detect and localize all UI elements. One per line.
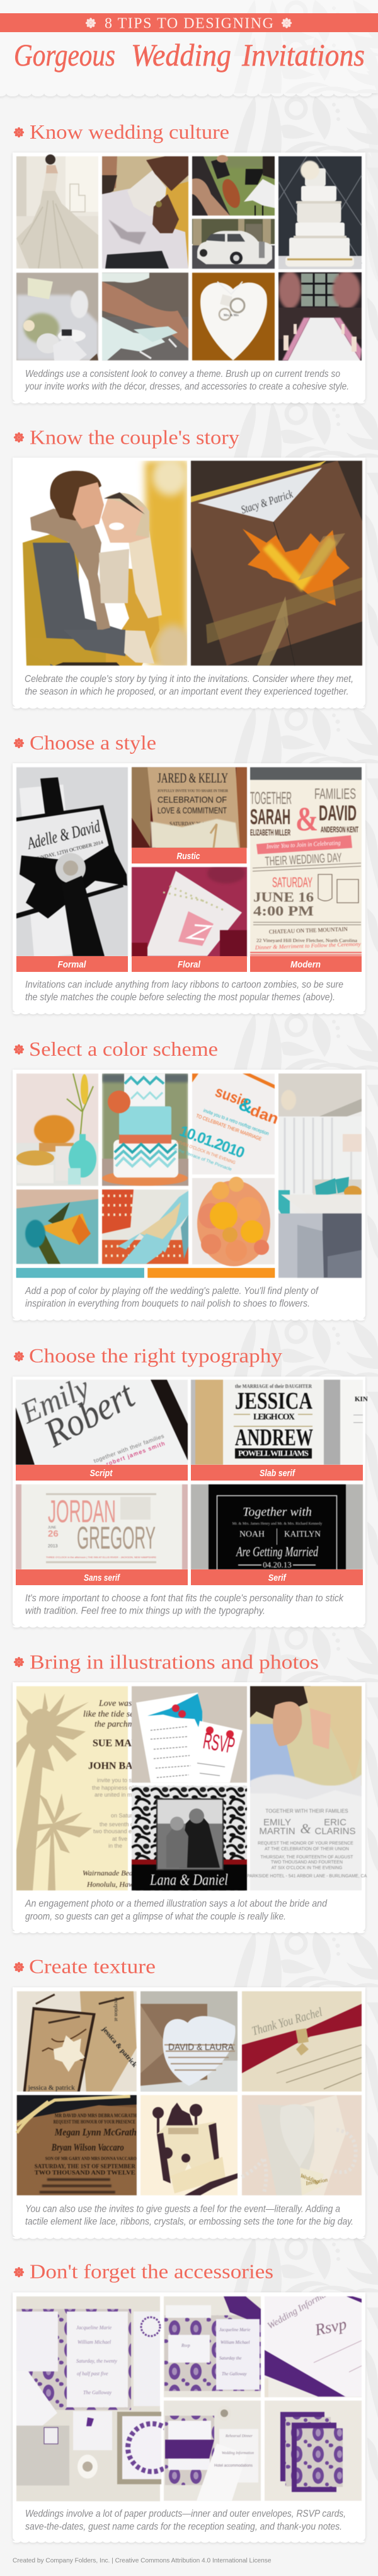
photo: purple stationery suite: Saturday, the twenty [76, 2358, 117, 2364]
panel: Choose a style [13, 763, 365, 1014]
photo: rustic invitation: SATURDAY 26 APRIL 2014 [169, 821, 226, 826]
label: Modern [250, 956, 362, 972]
photo: purple stationery suite: The Galloway [83, 2389, 112, 2395]
icon: flower [14, 2267, 24, 2277]
photo: lace couple invitation: & [300, 1820, 311, 1836]
photo: sans serif invitation: 26 [48, 1528, 59, 1539]
photo: sans serif invitation [15, 1484, 188, 1569]
photo: calla boutonniere [16, 1189, 99, 1264]
caption: the style matches the couple before selecting the most popular themes (above). [25, 992, 335, 1003]
photo: palm tree invitation: Love was [98, 1699, 132, 1708]
photo: serif invitation: NOAH [239, 1530, 265, 1539]
photo: lace couple invitation: CLARINS [314, 1826, 356, 1837]
photo: palm tree invitation: SUE MARIE [93, 1738, 149, 1748]
title: Wedding [131, 37, 231, 72]
header ornament [234, 0, 378, 282]
photo: susie and dan invitation: dan [248, 1102, 281, 1128]
photo: susie and dan invitation: & [236, 1094, 256, 1118]
panel card [13, 1987, 365, 2239]
photo: palm tree invitation: the seventh of [100, 1821, 135, 1827]
photo: kraft invitation with flower [16, 1990, 139, 2093]
photo: ceremony aisle [278, 272, 362, 361]
photo: orange bouquet [192, 1176, 275, 1267]
caption [25, 1286, 319, 1309]
photo: red ribbon invitation: Thank You Rachel [250, 2005, 324, 2038]
photo: sans serif invitation: JORDAN [48, 1494, 116, 1529]
photo: serif invitation: KAITLYN [284, 1530, 321, 1539]
caption [25, 2509, 346, 2533]
photo: embossed heart with pearls: Invitation [305, 2176, 328, 2186]
photo: purple envelopes [265, 2401, 362, 2501]
photo: modern invitation: TOGETHER [250, 788, 292, 807]
label: Serif: Serif [268, 1573, 287, 1583]
caption [25, 674, 353, 697]
photo: lace couple invitation: ERIC [324, 1817, 346, 1828]
photo: palm tree invitation: are united in marriage [94, 1791, 150, 1798]
icon: flower [14, 127, 24, 137]
panel card [13, 763, 365, 1014]
panel: Bring in illustrations and photos [13, 1682, 367, 1933]
photo: owl invitation [131, 1685, 247, 1783]
photo: lace couple invitation: EMILY [263, 1817, 291, 1828]
photo: slab serif invitation [190, 1379, 368, 1465]
photo: folder and ring bowl [163, 2400, 261, 2501]
photo: wood invitation: SATURDAY, THE 1ST OF SEPTEMBER [35, 2163, 135, 2169]
panel card [13, 1682, 365, 1933]
label: Sans serif [16, 1569, 188, 1585]
photo: wedding cake [278, 156, 362, 270]
label: Modern: Modern [290, 959, 321, 970]
label: Script [16, 1465, 188, 1481]
caption [25, 979, 343, 1003]
panel card [13, 2292, 365, 2543]
photo: lace couple invitation: AT THE CELEBRATION OF THEIR UNION [265, 1847, 349, 1851]
caption: groom, so guests can get a glimpse of what the couple is really like. [25, 1911, 286, 1922]
icon: flower [14, 1962, 24, 1972]
icon: banner flower left [86, 18, 96, 28]
photo: wood invitation: TWO THOUSAND AND TWELVE [35, 2169, 135, 2176]
photo: sans serif invitation: 2013 [48, 1544, 58, 1549]
caption: An engagement photo or a themed illustration says a lot about the bride and [25, 1898, 328, 1909]
photo: heart ring dish [192, 272, 275, 361]
label: Slab serif [191, 1465, 363, 1481]
heading: Don't forget the accessories: Don't forget the accessories [30, 2260, 273, 2283]
photo: palm tree invitation: Wairnanade Beach [83, 1868, 140, 1877]
photo: susie and dan invitation: SEVEN O'CLOCK IN THE EVENING [175, 1140, 236, 1165]
photo: lace couple invitation: MARTIN [259, 1826, 295, 1837]
photo: purple stationery suite [16, 2296, 164, 2502]
photo: RSVP close-up: Wedding Information [266, 2282, 340, 2331]
label: Formal [16, 956, 128, 972]
photo: bride [16, 154, 98, 269]
photo: orange flowers and vase [16, 1073, 98, 1186]
photo: slab serif invitation: JESSICA [235, 1388, 312, 1414]
photo: lace couple invitation: TWO THOUSAND AND FOURTEEN [271, 1860, 343, 1864]
caption: with tradition. Feel free to mix things up with the typography. [25, 1606, 265, 1616]
footer credit: Created by Company Folders, Inc. | Creative Commons Attribution 4.0 International License [13, 2556, 272, 2564]
caption: save-the-dates, guest name cards for the reception seating, and thank-you notes. [25, 2521, 342, 2533]
photo: lace couple invitation: TOGETHER WITH THEIR FAMILIES [265, 1808, 348, 1814]
background damask ornaments [234, 96, 378, 2481]
photo: vintage car [192, 218, 275, 270]
photo: pocket folder: The Galloway [222, 2371, 247, 2376]
photo: susie and dan invitation: susie [213, 1083, 251, 1111]
label: Serif [191, 1569, 363, 1585]
label: Sans serif: Sans serif [84, 1573, 121, 1583]
photo: sans serif invitation: THREE O'CLOCK in the afternoon | THE INN AT ELLIS RIVER - JACKSON, NEW HAMPSHIRE [46, 1556, 156, 1559]
header paper with scalloped edge [0, 0, 378, 96]
photo: modern invitation: SARAH [250, 805, 290, 829]
heading: Choose the right typography: Choose the right typography [29, 1344, 282, 1367]
panel: Don't forget the accessories [13, 2282, 365, 2543]
photo: modern invitation: ELIZABETH MILLER [250, 827, 290, 837]
photo: folder and ring bowl: Rehearsal Dinner [225, 2435, 253, 2439]
photo: red ribbon invitation [241, 1990, 362, 2092]
label: Floral: Floral [178, 959, 201, 970]
photo: pop-up castle card [140, 2095, 238, 2196]
label: Formal: Formal [58, 959, 86, 970]
photo: kraft invitation with flower: jessica & patrick [28, 2084, 75, 2091]
photo: serif invitation: 04.20.13 [263, 1560, 292, 1569]
photo: modern invitation [249, 766, 362, 956]
photo: black and white couple [131, 1785, 248, 1891]
photo: laser cut heart [140, 1990, 238, 2092]
caption: Add a pop of color by playing off the wedding's palette. You'll find plenty of [25, 1286, 319, 1297]
caption [25, 1898, 328, 1922]
photo: serif invitation: Are Getting Married [236, 1544, 319, 1559]
icon: flower [14, 1044, 24, 1054]
photo: palm tree invitation: Honolulu, Hawaii [86, 1880, 142, 1888]
caption: You can also use the invites to give guests a feel for the event—literally. Adding a [25, 2203, 340, 2215]
photo: palm tree invitation: in the [108, 1842, 122, 1849]
photo: modern invitation: Invite You to Join in Celebrating [266, 840, 341, 850]
caption: It's more important to choose a font that fits the couple's personality than to stick [25, 1593, 344, 1603]
photo: folder and ring bowl: Hotel accommodations [214, 2464, 253, 2468]
photo: lace couple invitation: REQUEST THE HONOR OF YOUR PRESENCE [258, 1841, 353, 1845]
photo: palm tree invitation: the parchment [94, 1719, 146, 1729]
heading: Create texture: Create texture [29, 1955, 156, 1978]
photo: script invitation: Emily [15, 1369, 94, 1430]
panel: Select a color scheme [13, 1070, 365, 1320]
photo: embossed heart with pearls [241, 2095, 362, 2196]
photo: table setting [16, 272, 99, 361]
title [14, 37, 365, 72]
photo: embossed heart with pearls: Wedding [299, 2172, 320, 2185]
photo: script invitation: robert james smith [105, 1440, 166, 1467]
photo: script invitation: Robert [37, 1373, 142, 1456]
photo: slab serif invitation: LEIGH COX [253, 1412, 295, 1422]
photo: serif invitation: Together with [243, 1505, 312, 1519]
photo: floral invitation [131, 866, 248, 957]
heading: Know wedding culture: Know wedding culture [30, 120, 229, 143]
photo: rustic invitation: JOYFULLY INVITE YOU TO SHARE IN THEIR [158, 789, 228, 793]
heading: Choose a style: Choose a style [30, 731, 156, 754]
photo: susie and dan invitation: on the Terrace of The Pinnacle [171, 1146, 232, 1172]
caption: inspiration in everything from bouquets to nail polish to shoes to flowers. [25, 1298, 310, 1309]
photo: shoes [101, 272, 189, 361]
photo: purple stationery suite: of half past five [77, 2371, 108, 2376]
caption: Invitations can include anything from lacy ribbons to cartoon zombies, so be sure [25, 979, 343, 990]
caption [25, 1593, 344, 1616]
photo: pocket folder: Jacqueline Marie [219, 2327, 250, 2332]
photo: lace couple invitation: AT SIX O'CLOCK IN THE EVENING [272, 1866, 342, 1870]
photo: slab serif invitation: the MARRIAGE of their DAUGHTER [235, 1383, 312, 1389]
photo: formal invitation [16, 767, 129, 956]
caption [25, 2203, 353, 2227]
photo: autumn couple [22, 460, 188, 666]
photo: palm tree invitation: JOHN BATES [88, 1760, 151, 1771]
photo: serif invitation: Mr. & Mrs. James Henry and Mr. & Mrs. Richard Kennedy [232, 1522, 322, 1526]
photo: wood invitation [15, 2094, 137, 2196]
photo: palm tree invitation [16, 1685, 153, 1891]
photo: leaf envelope: Stacy & Patrick [239, 487, 295, 516]
photo: script invitation [15, 1369, 188, 1467]
photo: chevron cake [101, 1073, 189, 1186]
photo: heart ring dish: Mrs. & Mrs [224, 315, 239, 318]
photo: script invitation: together with their families [93, 1433, 165, 1464]
panel card [13, 1070, 365, 1320]
photo: kraft invitation with flower: reception at [113, 1997, 119, 2022]
photo: palm tree invitation: the happiness of [92, 1784, 134, 1791]
photo: sans serif invitation: JUNE [48, 1526, 57, 1530]
photo: modern invitation: CHATEAU ON THE MOUNTAIN [269, 926, 348, 935]
title: Invitations [241, 37, 365, 72]
photo: lace couple invitation [247, 1685, 367, 1890]
photo: pocket folder: Rsvp [181, 2343, 190, 2348]
photo: modern invitation: & [295, 800, 318, 838]
photo: palm tree invitation: two thousand eleven [93, 1828, 146, 1834]
caption [25, 369, 349, 392]
photo: rustic invitation [131, 766, 248, 848]
photo: susie and dan invitation: TO CELEBRATE THEIR MARRIAGE [195, 1113, 262, 1142]
label: Floral [132, 956, 247, 972]
color bar: teal [16, 1268, 144, 1278]
photo: pocket folder [164, 2296, 261, 2398]
photo: purple stationery suite: Jacqueline Marie [76, 2325, 112, 2330]
panel: Create texture [13, 1987, 365, 2239]
banner text: 8 TIPS TO DESIGNING [105, 15, 273, 32]
panel card [13, 153, 365, 403]
photo: blue heels [101, 1189, 189, 1264]
photo: formal invitation: SUNDAY, 12TH OCTOBER 2014 [34, 840, 104, 862]
title: Gorgeous [14, 37, 115, 72]
photo: violinists [192, 154, 275, 216]
photo: susie and dan invitation: 10.01.2010 [177, 1123, 247, 1162]
label: Rustic: Rustic [176, 851, 200, 862]
photo: lace couple invitation: THURSDAY, THE FOURTEENTH OF AUGUST [261, 1855, 353, 1859]
photo: slab serif invitation: POWELL WILLIAMS [238, 1448, 309, 1458]
label: Script: Script [89, 1468, 113, 1479]
photo: serif invitation [190, 1484, 363, 1569]
photo: leaf envelope [190, 460, 363, 666]
label: Rustic [132, 848, 247, 863]
photo: pocket folder: Saturday the [219, 2355, 241, 2360]
photo: black and white couple: Lana & Daniel [149, 1871, 228, 1888]
color bar: orange [148, 1268, 275, 1278]
photo: palm tree invitation: invite you to share [97, 1777, 143, 1783]
photo: RSVP close-up: Rsvp [312, 2314, 348, 2339]
panel card [13, 458, 365, 708]
heading: Know the couple's story: Know the couple's story [30, 425, 239, 448]
photo: susie and dan invitation: invite you to a retro rooftop reception [203, 1107, 270, 1136]
photo: kraft invitation with flower: jessica & patrick [100, 2025, 139, 2069]
photo: slab serif invitation: KIN [355, 1395, 368, 1403]
photo: palm tree invitation: like the tide seeking [83, 1709, 153, 1719]
photo: pocket folder: William Michael [220, 2340, 250, 2345]
photo: lace couple invitation: PARKSIDE HOTEL - 541 ARBOR LANE - BURLINGAME, CA [247, 1874, 367, 1878]
label: Slab serif: Slab serif [260, 1468, 296, 1479]
panel: Know wedding culture [13, 153, 365, 403]
photo: palm tree invitation: at five [112, 1835, 127, 1842]
photo: cufflink [101, 156, 189, 269]
photo: laser cut heart: DAVID & LAURA [168, 2042, 234, 2052]
panel card [13, 1377, 365, 1627]
heading: Select a color scheme: Select a color scheme [29, 1037, 218, 1060]
panel: Choose the right typography [13, 1369, 368, 1627]
banner [0, 13, 378, 32]
photo: RSVP close-up [264, 2282, 362, 2398]
photo: modern invitation: JUNE 16 [253, 889, 314, 904]
photo: palm tree invitation: on Saturday [111, 1812, 142, 1818]
icon: flower [14, 1657, 24, 1667]
photo: modern invitation: SATURDAY [272, 874, 312, 890]
photo: modern invitation: 4:00 PM [253, 903, 314, 918]
photo: folder and ring bowl: Wedding Information [222, 2451, 254, 2456]
photo: modern invitation: Dinner & Merriment to Follow the Ceremony [255, 940, 361, 950]
heading: Bring in illustrations and photos: Bring in illustrations and photos [30, 1650, 319, 1673]
photo: purple stationery suite: William Michael [77, 2339, 112, 2345]
photo: turquoise dining room [278, 1073, 362, 1278]
icon: flower [14, 1351, 24, 1361]
photo: susie and dan invitation [171, 1073, 281, 1175]
photo: rustic invitation: CELEBRATION OF [158, 794, 227, 804]
photo: modern invitation: 22 Vineyard Hill Drive Fletcher, North Carolina [256, 938, 358, 943]
photo: slab serif invitation: ANDREW [235, 1424, 313, 1451]
panel: Know the couple's story [13, 458, 365, 708]
icon: banner flower right [282, 18, 292, 28]
icon: flower [14, 432, 24, 442]
icon: flower [14, 738, 24, 748]
